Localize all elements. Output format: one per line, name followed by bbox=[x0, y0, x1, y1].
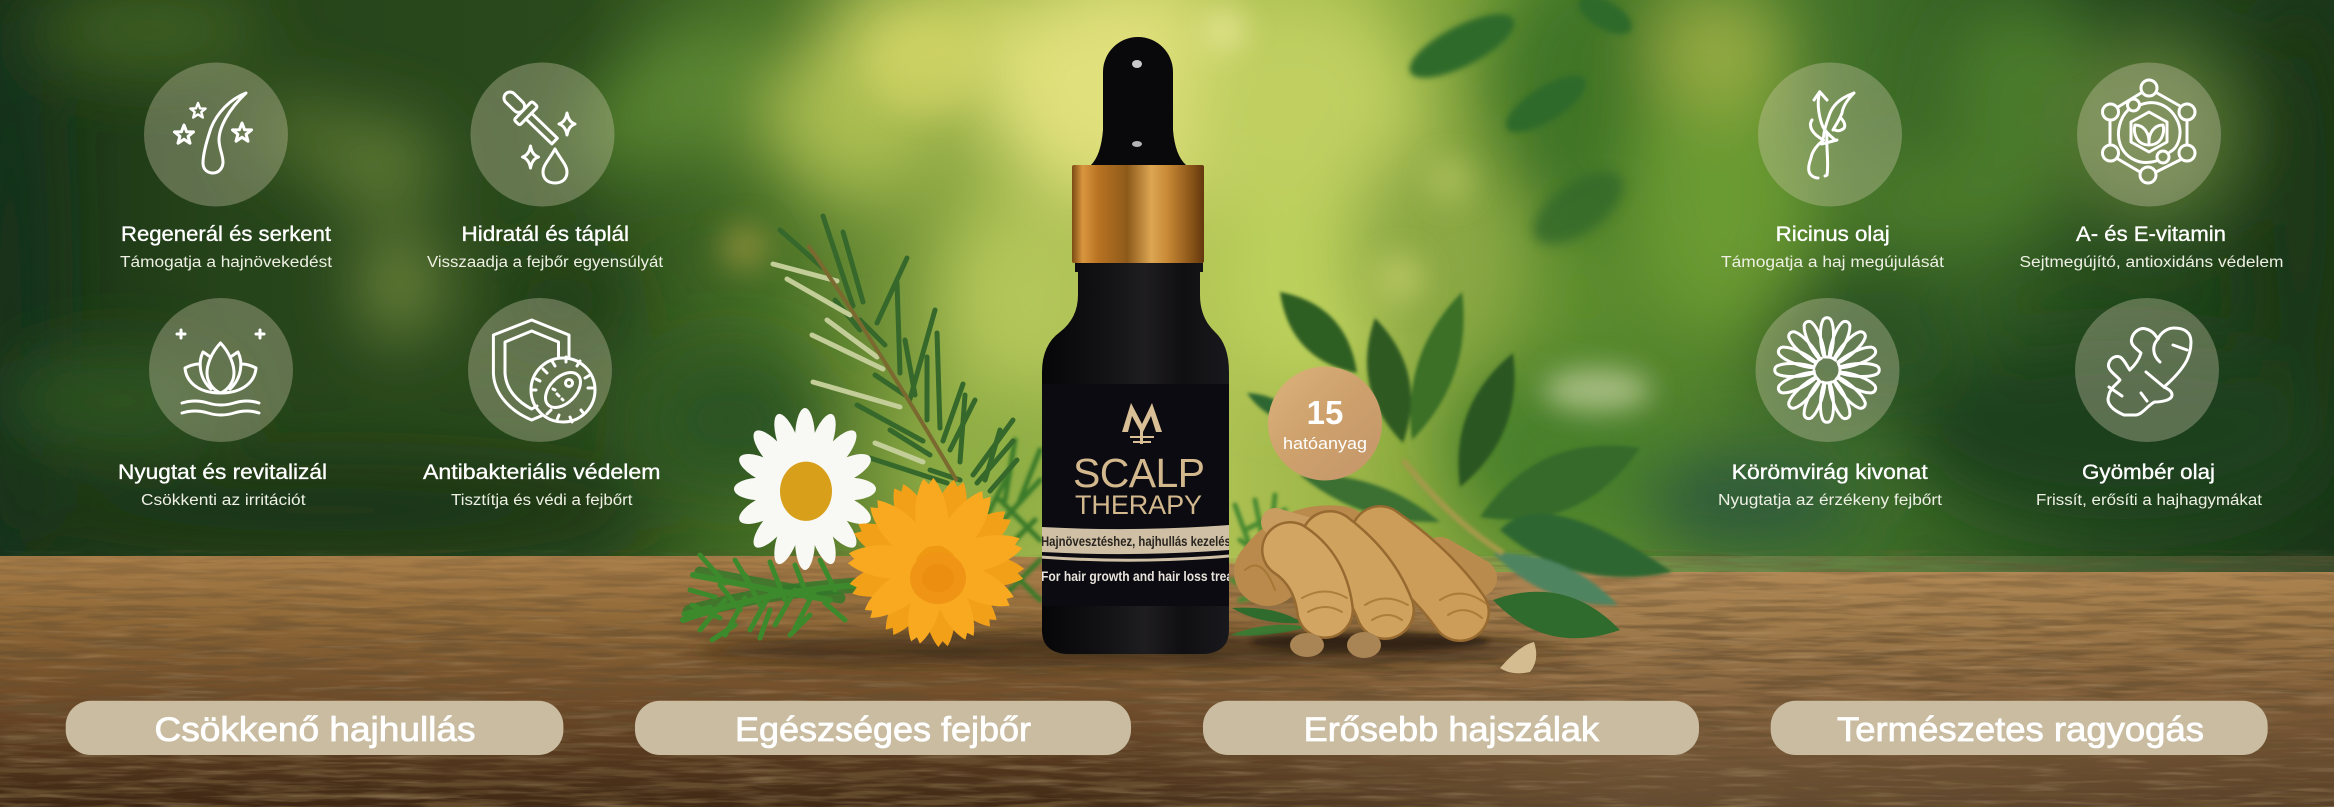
dropper bulb bbox=[1091, 37, 1186, 165]
icon: hair strands with arrow bbox=[1809, 92, 1854, 178]
benefit: Hidratál és táplál bbox=[427, 62, 664, 271]
benefit: Regenerál és serkent: Regenerál és serkent bbox=[121, 223, 331, 246]
result pill: Természetes ragyogás bbox=[1771, 701, 2268, 755]
result pill: Csökkenő hajhullás bbox=[66, 701, 563, 755]
ingredient: Ricinus olaj: Ricinus olaj bbox=[1776, 223, 1890, 246]
ingredient: Körömvirág kivonat: Nyugtatja az érzékeny fejbőrt bbox=[1718, 492, 1943, 509]
result pill: Erősebb hajszálak bbox=[1203, 701, 1699, 755]
ginger root bbox=[1245, 522, 1490, 651]
icon: lotus on water bbox=[177, 330, 264, 415]
result pill: Csökkenő hajhullás: Csökkenő hajhullás bbox=[154, 711, 476, 749]
benefit: Antibakteriális védelem: Antibakteriális védelem bbox=[423, 461, 660, 484]
ingredient: A- és E-vitamin bbox=[2020, 62, 2284, 271]
gold collar bbox=[1072, 165, 1204, 263]
ingredient: Körömvirág kivonat bbox=[1718, 298, 1943, 509]
ingredient: A- és E-vitamin: Sejtmegújító, antioxidáns védelem bbox=[2020, 254, 2284, 271]
brand name: SCALP bbox=[1073, 450, 1205, 496]
green tufts behind bottle bbox=[985, 440, 1285, 600]
badge number: 15 bbox=[1307, 394, 1343, 431]
result pill: Erősebb hajszálak: Erősebb hajszálak bbox=[1304, 711, 1600, 749]
result pill: Egészséges fejbőr: Egészséges fejbőr bbox=[735, 711, 1031, 749]
ingredient: Körömvirág kivonat: Körömvirág kivonat bbox=[1732, 461, 1928, 484]
icon: ginger root bbox=[2108, 328, 2191, 415]
bottle body bbox=[1042, 263, 1229, 654]
benefit: Regenerál és serkent: Támogatja a hajnövekedést bbox=[120, 254, 333, 271]
ingredient: Ricinus olaj bbox=[1721, 62, 1945, 271]
band text: Hajnövesztéshez, hajhullás kezeléséhez bbox=[1041, 533, 1256, 549]
ingredient: Gyömbér olaj: Frissít, erősíti a hajhagymákat bbox=[2036, 492, 2263, 509]
ingredient badge bbox=[1268, 366, 1382, 480]
result pill: Természetes ragyogás: Természetes ragyogás bbox=[1837, 711, 2204, 749]
small ginger pieces bbox=[1290, 632, 1536, 673]
logo mark bbox=[1122, 403, 1162, 444]
benefit: Nyugtat és revitalizál bbox=[118, 298, 327, 509]
calendula flower bbox=[847, 477, 1025, 648]
label band bbox=[1041, 525, 1229, 554]
product label bbox=[1042, 384, 1229, 606]
benefit: Nyugtat és revitalizál: Nyugtat és revitalizál bbox=[118, 461, 327, 484]
ingredient: A- és E-vitamin: A- és E-vitamin bbox=[2076, 223, 2226, 246]
icon: shield with bacterium bbox=[493, 320, 595, 422]
serum bottle bbox=[1041, 37, 1266, 654]
benefit: Hidratál és táplál: Hidratál és táplál bbox=[462, 223, 629, 246]
english text: For hair growth and hair loss treatment bbox=[1041, 568, 1266, 584]
olive branch bbox=[1230, 292, 1672, 638]
icon: dropper and drop bbox=[497, 84, 575, 183]
ingredient: Gyömbér olaj: Gyömbér olaj bbox=[2082, 461, 2215, 484]
brand subtitle: THERAPY bbox=[1075, 490, 1202, 520]
benefit: Nyugtat és revitalizál: Csökkenti az irritációt bbox=[141, 492, 306, 509]
ingredient: Gyömbér olaj bbox=[2036, 298, 2263, 509]
benefit: Antibakteriális védelem bbox=[423, 298, 660, 509]
icon: marigold flower bbox=[1775, 318, 1879, 422]
daisy bbox=[734, 408, 876, 570]
rosemary sprig bbox=[773, 216, 1017, 491]
benefit: Antibakteriális védelem: Tisztítja és védi a fejbőrt bbox=[451, 492, 633, 509]
lower green sprigs bbox=[683, 555, 860, 640]
icon: vitamin molecule with leaves bbox=[2102, 80, 2195, 183]
badge label: hatóanyag bbox=[1283, 434, 1367, 453]
result pill: Egészséges fejbőr bbox=[635, 701, 1131, 755]
icon: hair with stars bbox=[174, 93, 252, 173]
background: blurred green foliage bbox=[0, 0, 2334, 620]
ingredient: Ricinus olaj: Támogatja a haj megújulását bbox=[1721, 254, 1945, 271]
shadows under products bbox=[690, 634, 1570, 666]
benefit: Regenerál és serkent bbox=[120, 62, 333, 271]
wooden table bbox=[0, 556, 2334, 807]
benefit: Hidratál és táplál: Visszaadja a fejbőr egyensúlyát bbox=[427, 254, 664, 271]
